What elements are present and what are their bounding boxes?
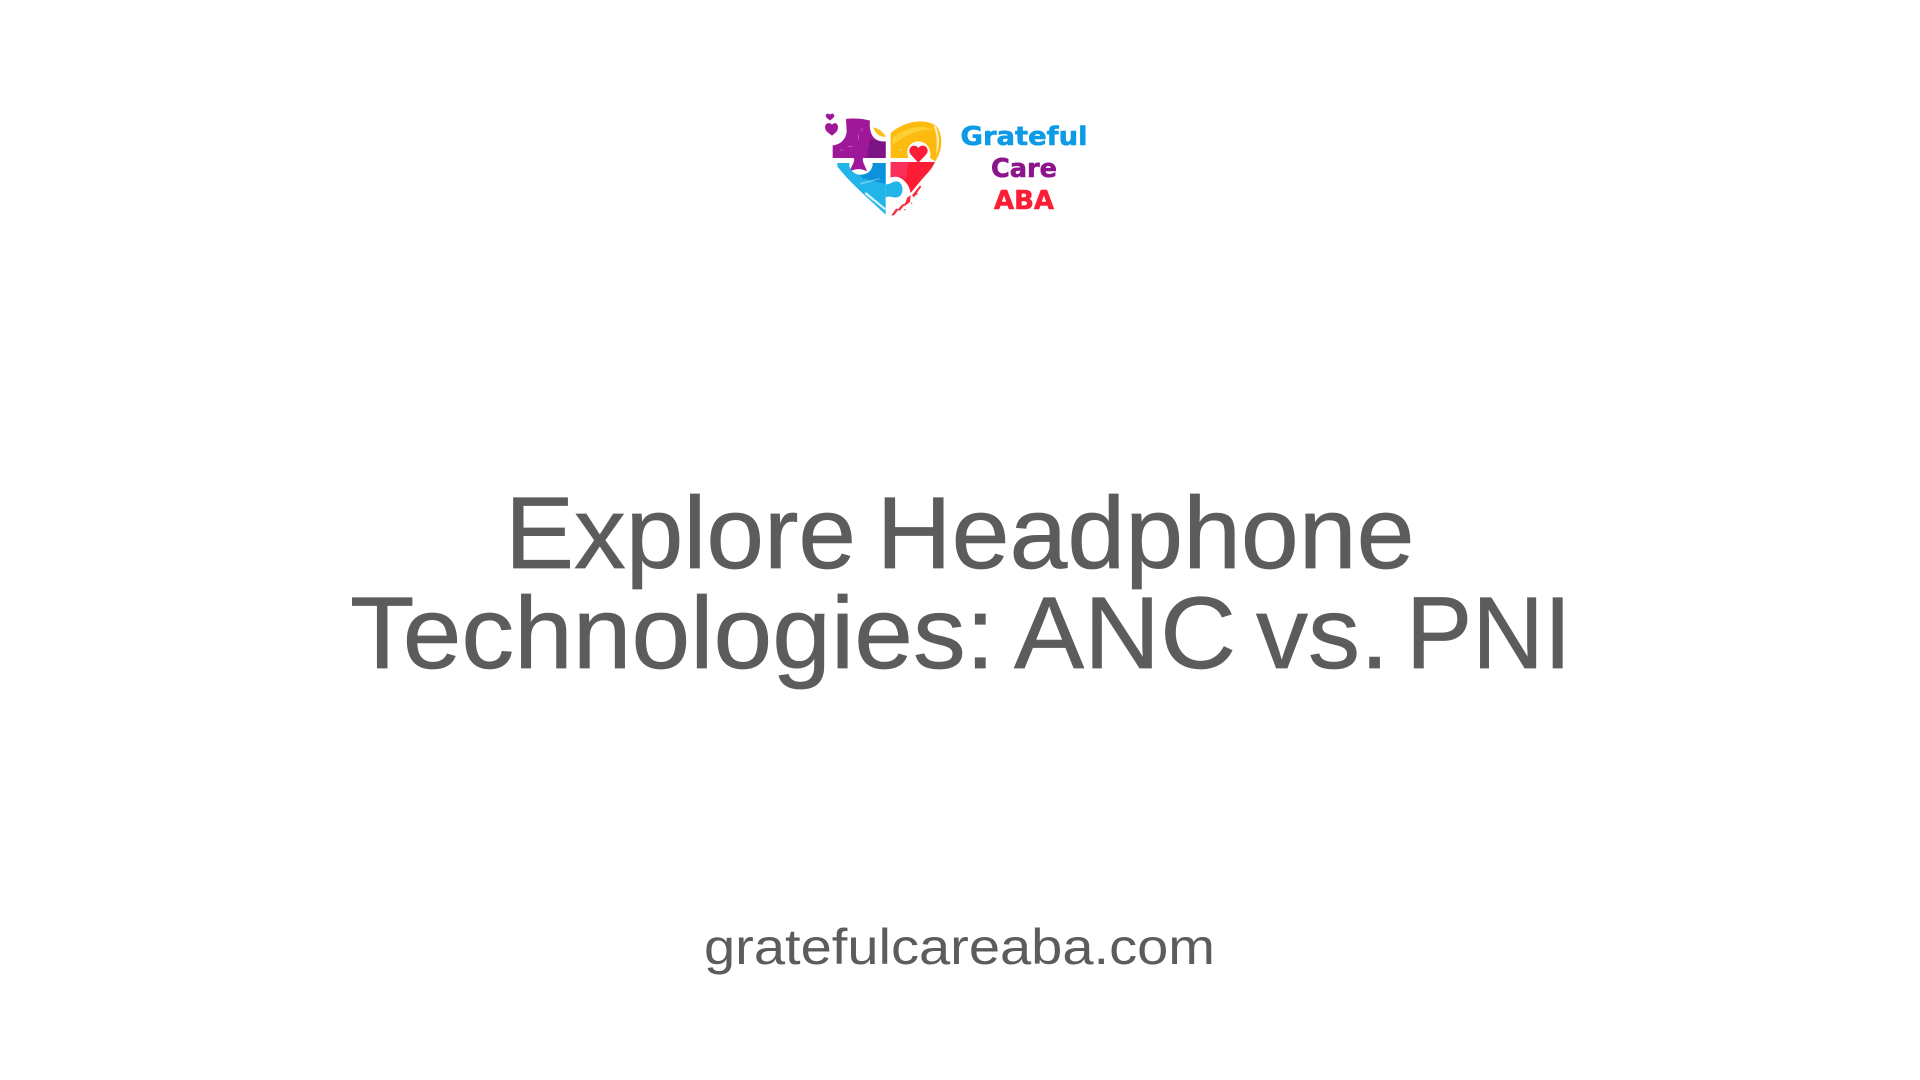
small hearts bbox=[825, 114, 838, 136]
red brush specks bbox=[891, 185, 921, 215]
title line 2 bbox=[350, 576, 1572, 690]
piece: red heart knob bbox=[909, 146, 928, 163]
piece: blue bbox=[837, 163, 886, 215]
piece: yellow bbox=[891, 121, 941, 161]
logo text: Care: Care bbox=[991, 154, 1057, 184]
logo text: Grateful: Grateful bbox=[960, 122, 1088, 152]
title line 2: Technologies: bbox=[350, 576, 995, 690]
title line 2: ANC bbox=[1014, 576, 1236, 690]
website url: gratefulcareaba.com bbox=[704, 919, 1215, 975]
title line 1: Explore bbox=[505, 476, 856, 590]
white streaks bbox=[865, 192, 885, 211]
logo: Grateful Care ABA bbox=[825, 114, 1088, 216]
title line 1: Headphone bbox=[876, 476, 1414, 590]
title line 2: vs. bbox=[1256, 576, 1389, 690]
piece: red bbox=[891, 162, 935, 193]
logo text: ABA: ABA bbox=[994, 186, 1054, 216]
icon: puzzle heart bbox=[825, 114, 941, 215]
crescent bbox=[873, 127, 886, 137]
piece: purple bbox=[833, 119, 886, 171]
title line 2: PNI bbox=[1406, 576, 1572, 690]
title line 1 bbox=[505, 476, 1414, 590]
title bbox=[350, 476, 1572, 690]
